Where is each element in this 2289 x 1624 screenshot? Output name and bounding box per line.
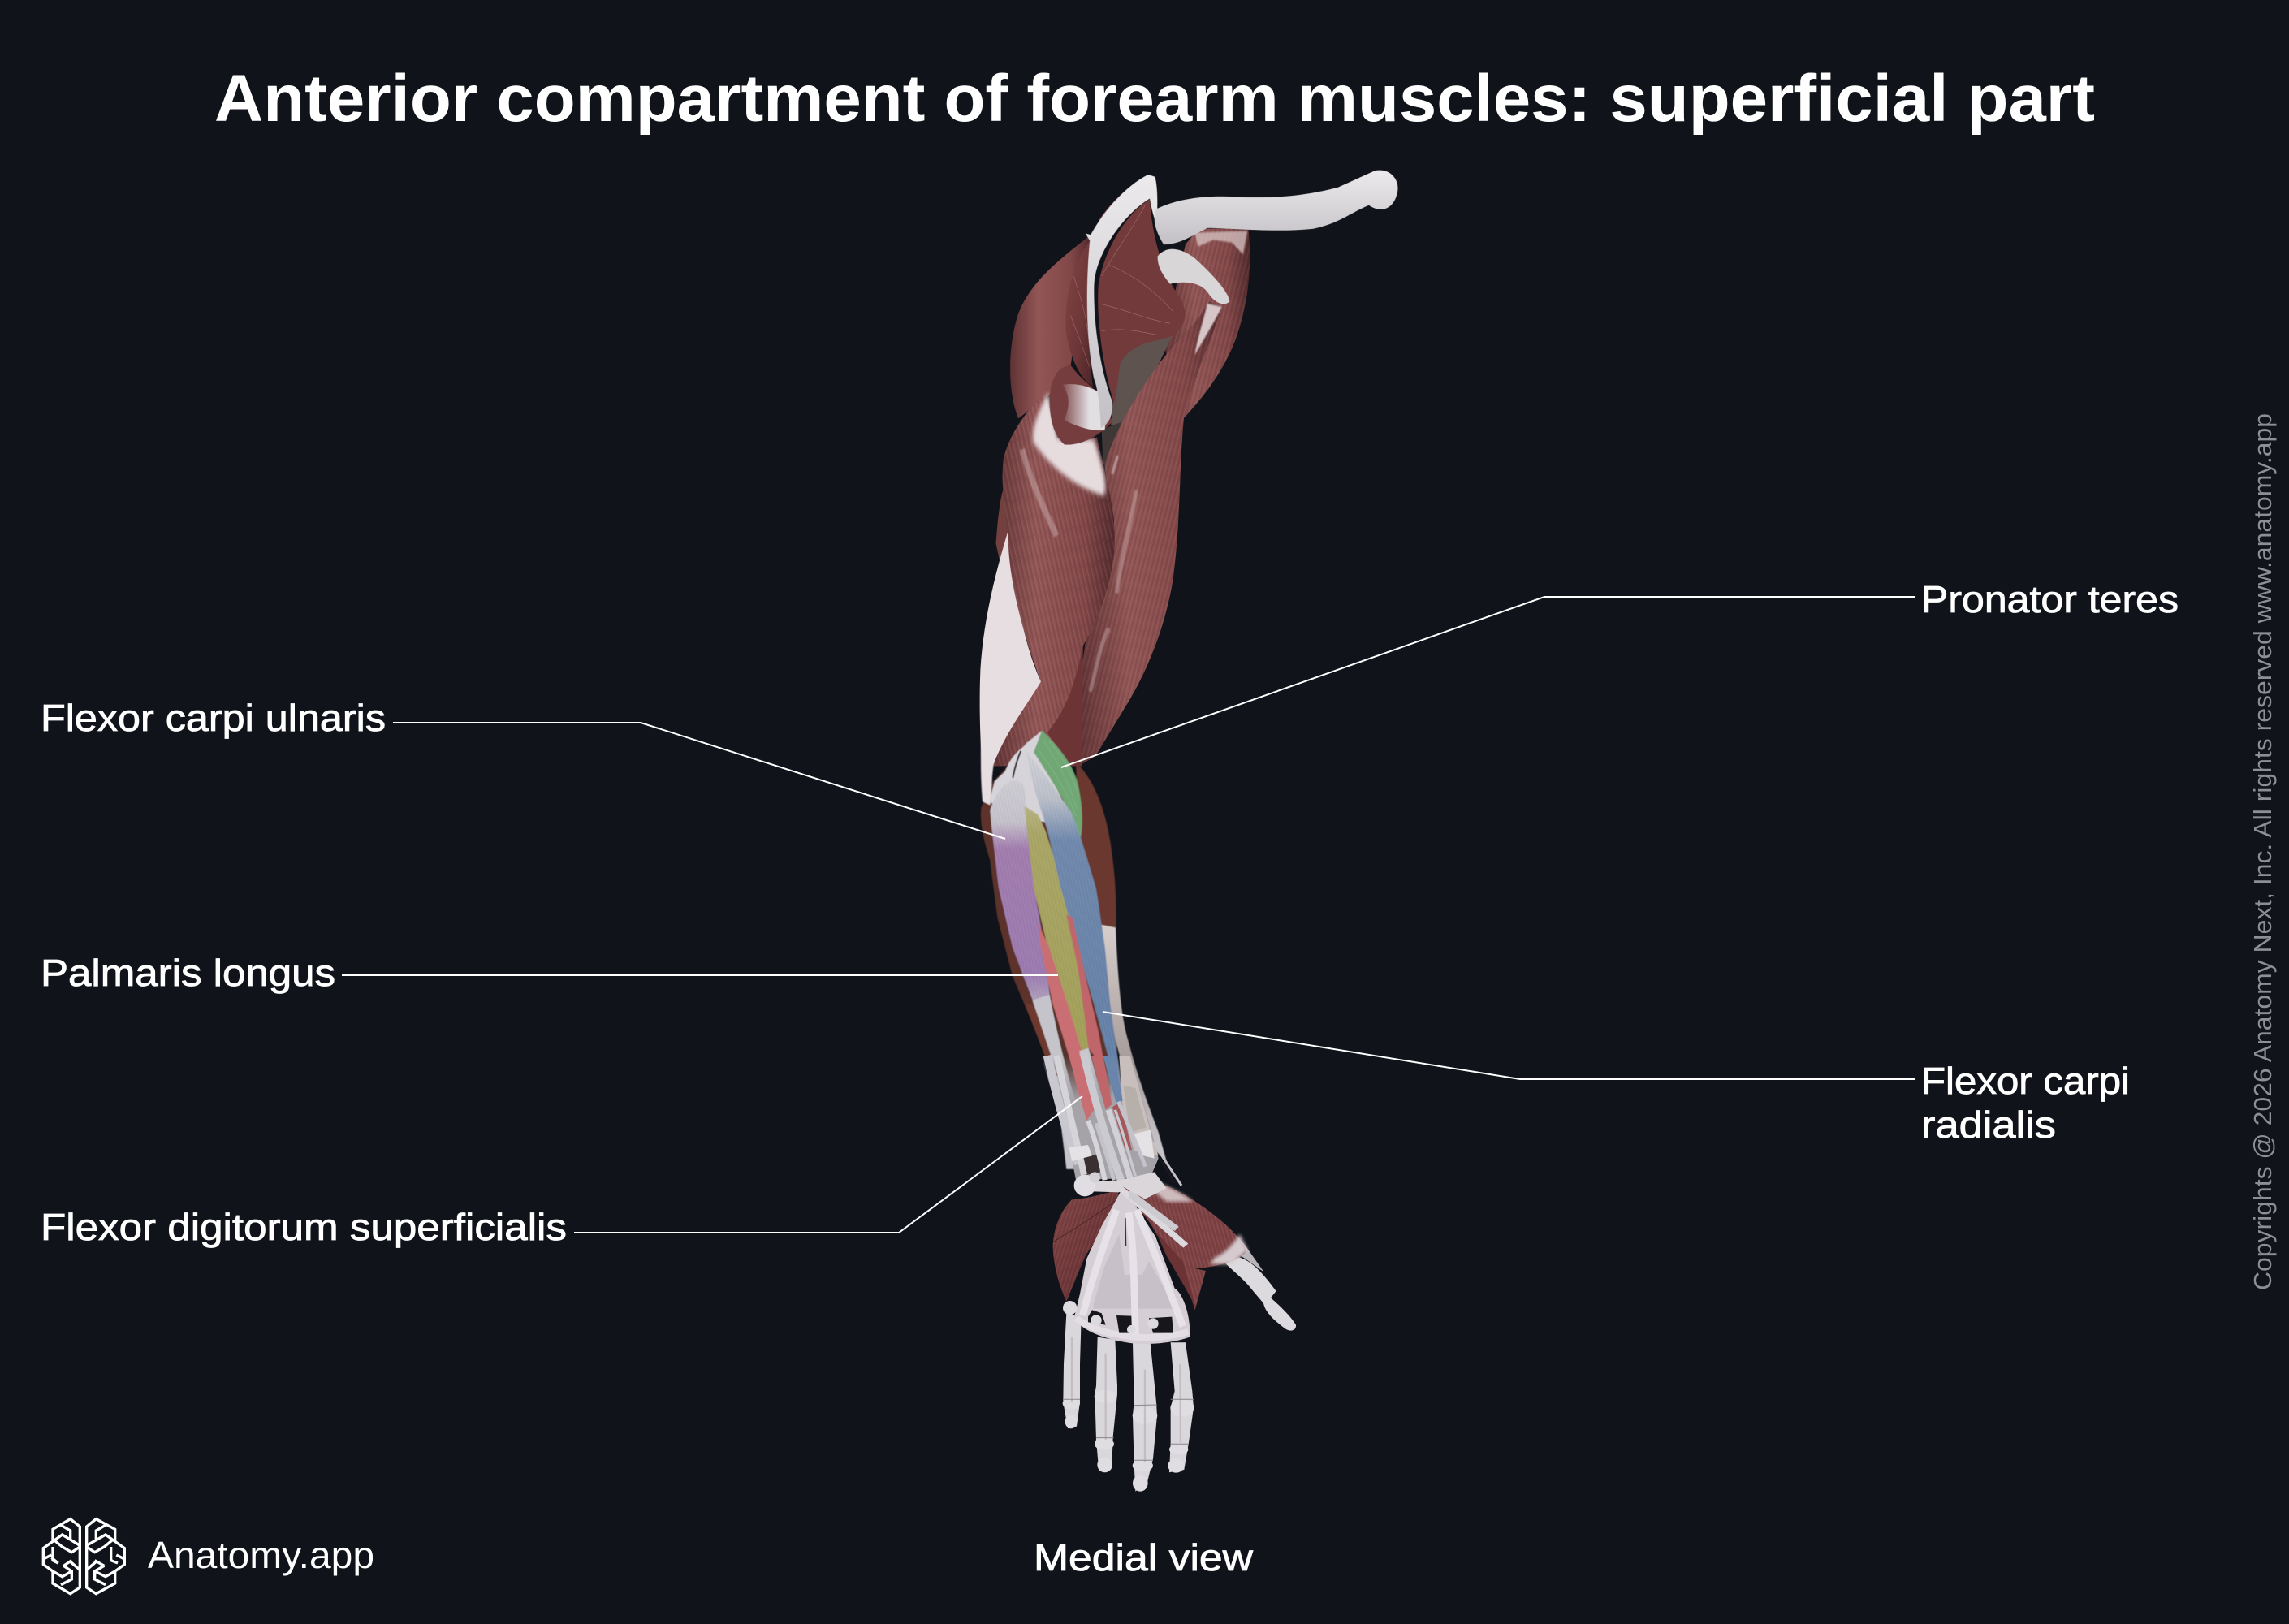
teres tendon knob	[1050, 365, 1112, 445]
title: Anterior compartment of forearm muscles: superficial part	[214, 62, 2095, 136]
callout line: palmaris longus	[342, 974, 1058, 976]
pronator teres in green	[1034, 731, 1082, 840]
carpal band	[1094, 1172, 1167, 1199]
biceps muscle	[1078, 301, 1222, 766]
flexor carpi radialis in blue	[1026, 751, 1123, 1107]
logo wordmark: Anatomy.app	[148, 1534, 374, 1576]
ulna head	[1074, 1175, 1095, 1196]
callout line: flexor carpi ulnaris	[393, 723, 1005, 839]
hypothenar muscle	[1053, 1190, 1118, 1302]
deltoid muscle behind clavicle	[1164, 228, 1250, 420]
forearm	[981, 715, 1167, 1169]
left lower muscle sliver	[1025, 1003, 1058, 1077]
muscle colour bands	[1069, 1056, 1094, 1121]
thenar muscles	[1123, 1181, 1246, 1310]
wrist tendons	[1041, 1056, 1181, 1186]
palmaris longus in yellow	[1025, 806, 1089, 1051]
triceps tendon patch	[1033, 392, 1105, 495]
index finger	[1168, 1342, 1194, 1473]
scapular spine	[1086, 175, 1157, 428]
flexor digitorum superficialis in pink	[1066, 914, 1111, 1107]
label: flexor carpi radialis: Flexor carpi	[1921, 1060, 2130, 1102]
thumb and palmar tendons	[1119, 1187, 1188, 1248]
brachioradialis tendon	[1102, 925, 1167, 1161]
callout line: pronator teres	[1061, 597, 1915, 767]
illustration: arm muscles and bones	[980, 171, 1398, 1492]
infraspinous fan muscle	[1098, 199, 1186, 404]
flexor tendon below purple belly	[1033, 995, 1090, 1169]
label: pronator teres: Pronator teres	[1921, 578, 2179, 620]
label: flexor carpi radialis: radialis	[1921, 1104, 2056, 1146]
shoulder and upper arm	[980, 171, 1398, 766]
finger tendons	[1072, 1337, 1181, 1462]
thumb	[1226, 1256, 1296, 1331]
wrist nodule	[1069, 1145, 1092, 1161]
supraspinous fan muscle	[1065, 240, 1093, 387]
wrist tendon base	[1041, 1056, 1159, 1180]
radial tendon block	[1119, 1056, 1159, 1155]
rear shoulder muscle	[1010, 235, 1091, 418]
thin rear muscle edge	[996, 486, 1010, 565]
carpal shadow	[1078, 1155, 1100, 1176]
triceps muscle mass	[993, 394, 1115, 766]
white triceps tendon	[980, 530, 1041, 764]
label: flexor digitorum superficialis: Flexor digitorum superficialis	[41, 1206, 567, 1248]
clavicle bone	[1155, 171, 1398, 244]
triceps lower tendon end	[981, 715, 1013, 805]
callout line: flexor digitorum superficialis	[574, 1096, 1082, 1233]
ring finger	[1095, 1337, 1117, 1472]
dark muscle between flexors	[1041, 944, 1094, 1126]
middle finger	[1133, 1342, 1157, 1492]
triceps lower shadow crease	[1047, 646, 1083, 766]
flexor carpi ulnaris in purple	[990, 780, 1050, 1003]
palmaris tendon	[1079, 1048, 1107, 1169]
copyright note: Copyrights @ 2026 Anatomy Next, Inc. All rights reserved www.anatomy.app	[2248, 413, 2277, 1290]
label: palmaris longus: Palmaris longus	[41, 952, 335, 994]
label: flexor carpi ulnaris: Flexor carpi ulnaris	[41, 697, 386, 739]
tendons	[1047, 1056, 1146, 1183]
label: flexor carpi radialis	[1921, 1060, 2130, 1146]
logo: brain icon	[43, 1519, 124, 1594]
little finger	[1063, 1313, 1082, 1428]
coracoid process	[1158, 249, 1229, 304]
forearm base tissue	[981, 731, 1123, 1115]
view caption: Medial view	[1034, 1536, 1254, 1579]
common flexor origin	[989, 731, 1074, 825]
callout line: flexor carpi radialis	[1103, 1012, 1915, 1079]
brachioradialis muscle	[1076, 762, 1116, 941]
aponeurosis gaps	[1088, 1310, 1173, 1333]
grey teres region	[1111, 327, 1177, 425]
palmar aponeurosis	[1074, 1187, 1190, 1344]
hand	[1053, 1172, 1296, 1492]
